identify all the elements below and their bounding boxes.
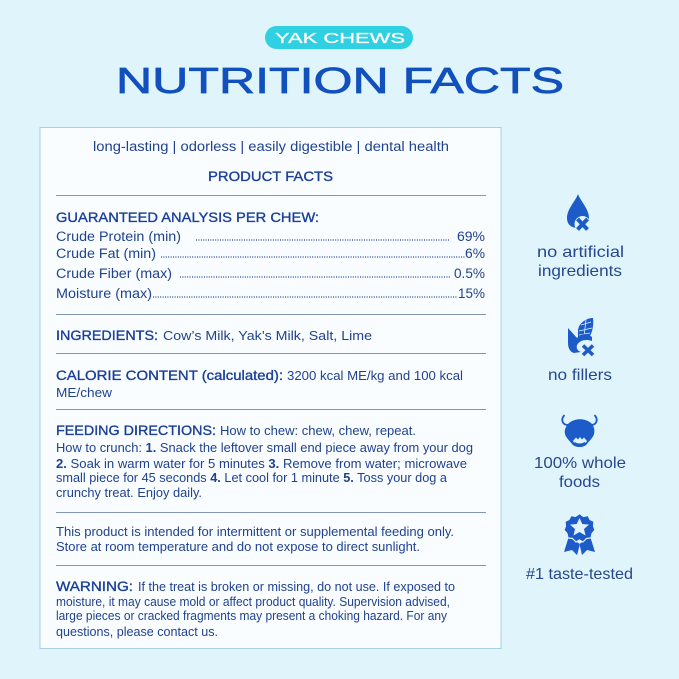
section: warning: WARNING:	[56, 578, 133, 594]
section: feeding directions	[56, 422, 473, 500]
section: calorie content: CALORIE CONTENT (calculated):	[56, 367, 283, 383]
section: feeding directions: crunchy treat. Enjoy daily.	[56, 486, 202, 500]
heading: product facts: PRODUCT FACTS	[208, 168, 333, 184]
section: ingredients	[56, 327, 372, 343]
section: ingredients: Cow’s Milk, Yak’s Milk, Salt, Lime	[163, 328, 372, 343]
row: crude fat	[56, 246, 485, 261]
row: crude protein: 69%	[457, 229, 485, 244]
text: no artificial ingredients: no artificial	[537, 244, 624, 261]
row: moisture	[56, 286, 485, 301]
row: moisture: 15%	[458, 286, 485, 301]
section: warning: moisture, it may cause mold or affect product quality. Supervision advised,	[56, 595, 450, 609]
row: crude protein: Crude Protein (min)	[56, 229, 181, 244]
row: crude fat: 6%	[465, 246, 485, 261]
text: no fillers: no fillers	[548, 367, 612, 384]
panel: product facts label	[40, 128, 501, 648]
section: feeding directions: FEEDING DIRECTIONS:	[56, 422, 216, 438]
text: 100% whole foods: 100% whole	[534, 455, 626, 472]
section: calorie content: 3200 kcal ME/kg and 100 kcal	[287, 369, 463, 383]
icon: yak head	[562, 415, 597, 447]
badge: yak chews: YAK CHEWS	[275, 30, 405, 47]
section: feeding directions: 2. Soak in warm water for 5 minutes 3. Remove from water; microwave	[56, 457, 467, 471]
row: crude fiber: Crude Fiber (max)	[56, 266, 172, 281]
text: 100% whole foods	[534, 455, 626, 491]
text: 100% whole foods: foods	[559, 474, 600, 491]
row: crude protein	[56, 229, 485, 244]
section: feeding directions: small piece for 45 seconds 4. Let cool for 1 minute 5. Toss your dog a	[56, 471, 447, 485]
row: crude fat: Crude Fat (min)	[56, 246, 156, 261]
badge: yak chews	[265, 26, 413, 49]
section: feeding directions: How to crunch: 1. Snack the leftover small end piece away from your dog	[56, 441, 473, 455]
heading: guaranteed analysis: GUARANTEED ANALYSIS PER CHEW:	[56, 209, 319, 225]
section: storage note	[56, 525, 454, 554]
row: moisture: Moisture (max)	[56, 286, 152, 301]
section: calorie content: ME/chew	[56, 386, 113, 400]
icon: water drop with x	[567, 194, 590, 232]
section: warning	[56, 578, 455, 639]
text: no artificial ingredients	[537, 244, 624, 280]
row: crude fiber: 0.5%	[454, 266, 485, 281]
section: warning: questions, please contact us.	[56, 625, 218, 639]
text: no artificial ingredients: ingredients	[538, 263, 622, 280]
section: calorie content	[56, 367, 463, 400]
section: storage note: Store at room temperature and do not expose to direct sunlight.	[56, 540, 420, 554]
icon: corn with x	[568, 318, 596, 358]
section: feeding directions: How to chew: chew, chew, repeat.	[220, 424, 416, 438]
text: #1 taste-tested: #1 taste-tested	[526, 566, 633, 583]
section: warning: large pieces or cracked fragments may present a choking hazard. For any	[56, 609, 448, 623]
icon: award ribbon with star	[564, 514, 595, 555]
section: storage note: This product is intended for intermittent or supplemental feeding only.	[56, 525, 454, 539]
section: guaranteed analysis	[56, 209, 485, 301]
section: ingredients: INGREDIENTS:	[56, 327, 158, 343]
row: crude fiber	[56, 266, 485, 281]
title: NUTRITION FACTS	[116, 60, 564, 101]
section: warning: If the treat is broken or missing, do not use. If exposed to	[138, 580, 455, 594]
tagline: long-lasting | odorless | easily digestible | dental health	[93, 139, 449, 154]
